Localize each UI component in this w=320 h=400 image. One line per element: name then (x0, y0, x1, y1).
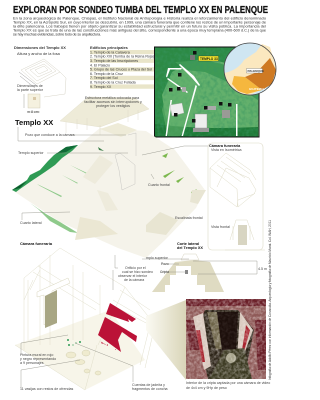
labels temple: Templo superior (18, 151, 44, 155)
temple illustration (12, 97, 206, 258)
labels temple: Cuarto frontal (148, 183, 170, 187)
section: lateral cut: Cripta (160, 270, 169, 274)
panel: main buildings legend: 7. Templo del Sol (90, 76, 118, 80)
labels chamber: 11 vasijas con restos de ofrendas (20, 387, 73, 391)
labels temple: Pozo que conduce a la cámara (25, 133, 75, 137)
labels temple: Escalinata frontal (175, 216, 203, 220)
labels temple: Cuarto lateral (20, 221, 42, 225)
section: lateral cut (142, 242, 267, 292)
heading: Templo XX: Templo XX (15, 118, 53, 127)
labels chamber: cual se hizo sondeo (122, 270, 153, 274)
panel: main buildings legend: 6. Templo de la Cruz (90, 72, 123, 76)
locator map inset: PALENQUE (248, 69, 264, 73)
labels chamber: observar el interior (118, 274, 148, 278)
panel: dimensions (14, 45, 66, 114)
green fragments (67, 339, 81, 346)
text: metal structure: facilitar accesos sin interrupciones y (84, 100, 142, 104)
icon: top plan (24, 94, 40, 112)
map number markers (169, 51, 232, 122)
text: metal structure: Estructura metálica colocada para (85, 96, 139, 100)
panel: main buildings legend: 8. Templo de la Cruz Foliada (90, 80, 136, 84)
intro text: la élite palencana. Los trabajos tienen por objeto garantizar su estabilidad estructural y permitir en un futuro su visita pública. La importancia del (13, 24, 266, 28)
photo: crypt interior (186, 299, 266, 379)
panel: main buildings legend: 5. Grupo de las Cruces o Plaza del Sol (90, 68, 152, 72)
section: lateral cut: mplo superior (146, 256, 169, 260)
panel: dimensions: Dimensiones del Templo XX (14, 45, 66, 50)
labels chamber: de la cámara (124, 278, 144, 282)
labels chamber: Pintura mural en rojo (20, 353, 53, 357)
panel: main buildings legend: 3. Templo de las Inscripciones (90, 59, 138, 63)
panel: dimensions: Altura y ancho de la fosa (17, 51, 61, 56)
front staircase (83, 155, 113, 184)
section: lateral cut: Corte lateral (177, 242, 199, 246)
labels chamber: Orificio por el (125, 266, 146, 270)
photo caption: de 4x4 cm y 9Hp de peso (186, 386, 227, 390)
vessels (66, 350, 101, 375)
red painted walls (98, 303, 137, 352)
panel: dimensions: Dimensiones de (17, 84, 43, 88)
label: Templo XX: TEMPLO 33 (200, 57, 218, 61)
panel: funerary chamber: Vista frontal (211, 225, 230, 229)
section: lateral cut: del Templo XX (177, 246, 203, 250)
intro text: Templo XX, en la Acrópolis Sur, en cuyo interior se descubrió, en 1999, una cámara funeraria que contiene los restos de un importante personaje de (13, 20, 266, 24)
text: metal structure: proteger los vestigios (96, 104, 130, 108)
panel: main buildings legend (90, 45, 154, 89)
panel: funerary chamber: Cámara funeraria (209, 144, 241, 148)
photo caption: Interior de la cripta captada por una cámara de video (186, 381, 270, 385)
panel: main buildings legend: 1. Templo de la Calavera (90, 50, 130, 54)
locator map inset (224, 43, 276, 95)
labels chamber (20, 255, 168, 391)
map of Palenque (154, 47, 259, 137)
wire cutaway (115, 133, 136, 190)
labels chamber: fragmentos de concha (132, 387, 168, 391)
panel: main buildings legend: 9. Templo XX (90, 85, 112, 89)
photo wedge (146, 300, 186, 380)
panel: main buildings legend: 2. Templo XIII (Tumba de la Reina Roja) (90, 55, 154, 59)
locator map inset: GUATEMALA (249, 87, 267, 91)
photo caption (186, 381, 270, 390)
intro text: Templo XX es que se trata de una de las construcciones más antiguas del sitio, correspondiente a una época muy temprana (400-600 d.C.) de la que (13, 28, 266, 32)
intro text (13, 16, 266, 36)
panel: dimensions: la parte superior (17, 88, 44, 92)
text: metal structure (84, 96, 142, 108)
section: lateral cut: 4.5 m (258, 267, 267, 271)
green vegetation (12, 145, 197, 233)
labels chamber: Cuentas de jadeíta y (132, 383, 165, 387)
panel: main buildings legend: 4. El Palacio (90, 63, 110, 67)
labels temple (18, 127, 208, 225)
panel: main buildings legend: Edificios principales (90, 45, 128, 50)
section: lateral cut: Pozo (161, 262, 169, 266)
intro text: se hay muchas evidencias, sobre todo de su arquitectura. (13, 32, 101, 36)
intro text: En la zona arqueológica de Palenque, Chiapas, el Instituto Nacional de Antropología e Historia realiza el reforzamiento del edificio denominado (13, 16, 266, 20)
panel: dimensions: m 8 cm (27, 110, 39, 114)
labels chamber: a 9 personajes (20, 361, 44, 365)
roof structure (60, 97, 149, 127)
labels chamber: y negro representando (20, 357, 56, 361)
chamber illustration (15, 248, 155, 390)
icon: stepped pyramid dimensions (19, 59, 66, 97)
credit: Infografía de Adolfo Pérez con información de Conaculta. Arqueología y fotografía de Mauricio Marat. Col. INAH, 2011 (268, 220, 272, 380)
panel: funerary chamber: Vista en Isométrica (211, 148, 242, 152)
heading: funerary chamber lower: Cámara funeraria (20, 241, 53, 246)
panel: funerary chamber (208, 143, 265, 250)
